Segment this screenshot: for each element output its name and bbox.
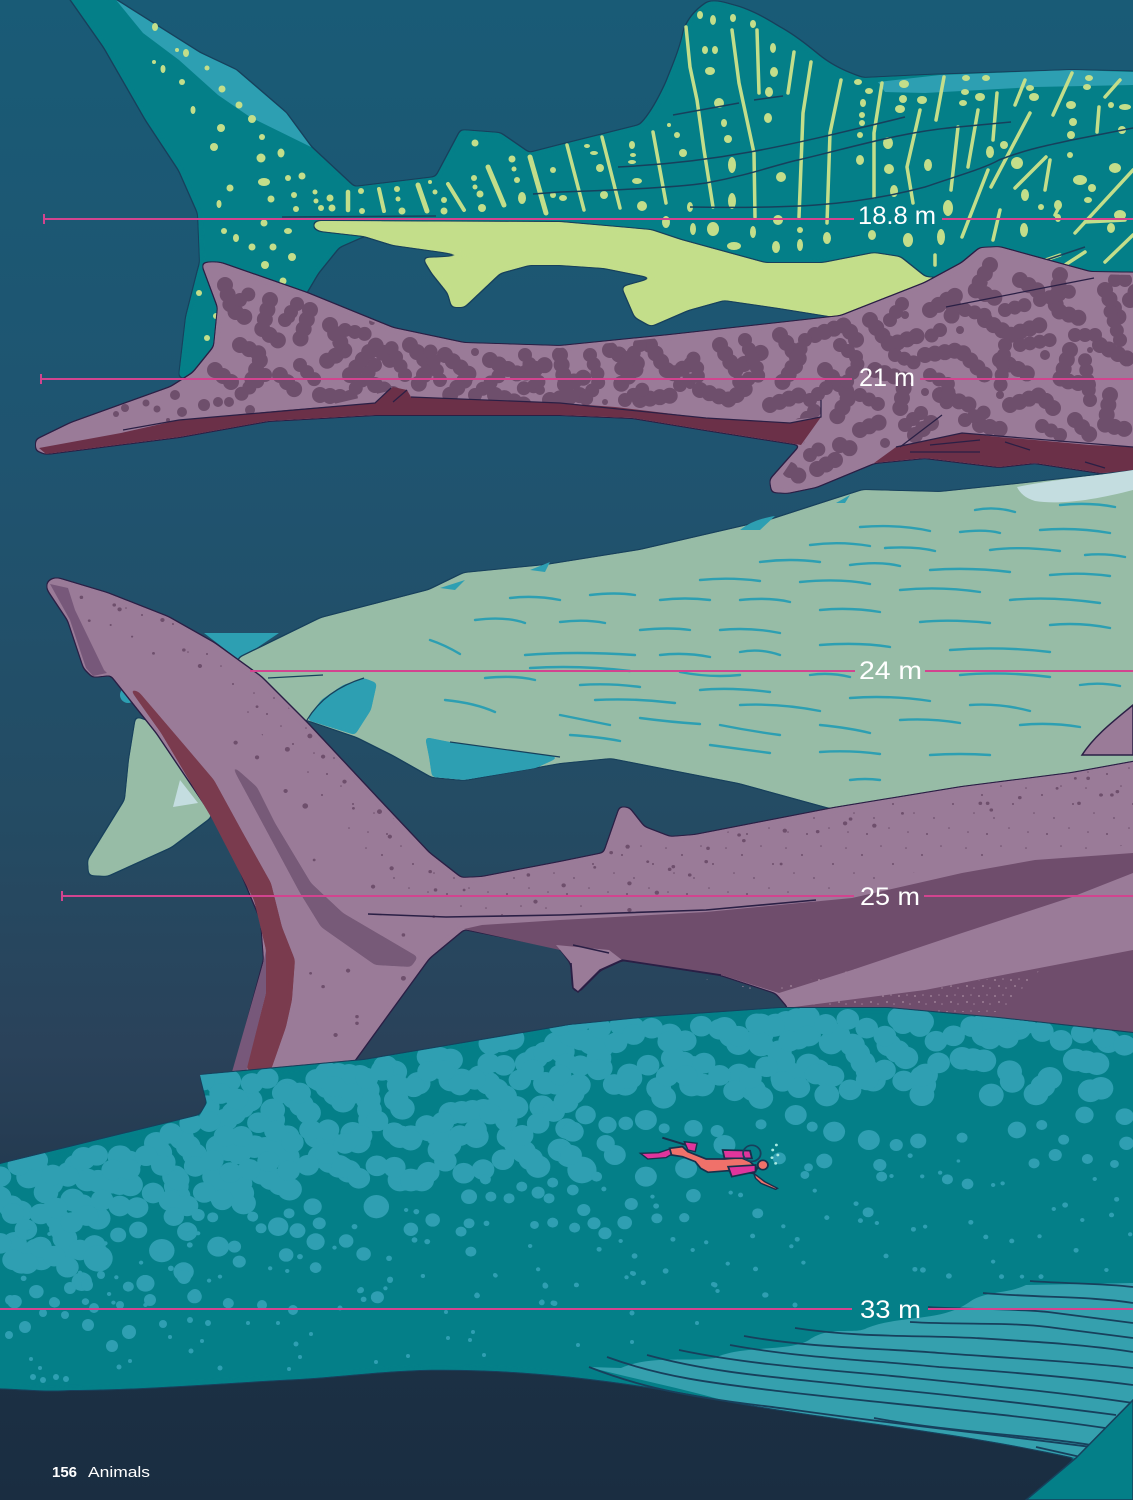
purple shark maroon underside: [874, 433, 1133, 473]
blue whale throat grooves panel: [589, 1283, 1133, 1458]
right mottling blobs: [560, 1015, 1133, 1298]
diver arm: [754, 1173, 777, 1189]
whale dorsal ridge highlights: [440, 495, 850, 590]
scale 21 m: 21 m: [859, 364, 915, 392]
purple shark body lines: [123, 278, 1133, 468]
purple shark tail spots: [113, 390, 255, 422]
whale shark tail highlight: [116, 0, 311, 147]
diver fins: [640, 1142, 697, 1159]
shark tail maroon edge: [129, 688, 295, 1070]
scale 24 m: 24 m: [859, 657, 922, 685]
blue whale: [0, 1008, 1133, 1500]
whale small teal tail tip: [120, 687, 136, 703]
shark body: [47, 578, 1133, 1080]
whale shark stripes: [348, 27, 1133, 265]
scale 25 m: [62, 883, 1133, 911]
whale shark: [57, 0, 1133, 385]
shark dark belly: [464, 853, 1133, 993]
diver head: [758, 1160, 768, 1170]
sperm whale: [88, 468, 1133, 876]
shark pelvic fin: [556, 945, 622, 992]
whale rear fin: [425, 737, 560, 780]
whale shark body: [57, 0, 1133, 385]
blue whale body: [0, 1008, 1133, 1500]
whale skin wrinkles: [430, 504, 1125, 780]
page footer: 156: [52, 1464, 77, 1481]
scale 33 m: 33 m: [860, 1296, 921, 1324]
shark coarse speckle on tail: [80, 596, 538, 1037]
page footer: [52, 1464, 150, 1481]
dark fin at whale belly: [1082, 705, 1133, 755]
purple shark body: [36, 247, 1133, 493]
shark belly grain highlight: [700, 968, 1040, 1012]
page footer: Animals: [88, 1464, 150, 1481]
whale shark lime underside and fins: [313, 221, 1000, 326]
shark pelvic fin line: [571, 945, 721, 992]
blue whale throat groove lines: [589, 1281, 1133, 1458]
whale shark body lines: [282, 96, 1133, 262]
whale shark back highlight: [878, 70, 1133, 93]
shark tail inner streak: [230, 763, 418, 967]
shark tail lower shade: [232, 950, 266, 1072]
whale fin outline: [268, 675, 560, 757]
shark lateral line: [368, 900, 816, 917]
shark fine speckle: [110, 600, 1133, 918]
purple shark mottling: [215, 265, 1133, 480]
scale lines and labels: [0, 202, 1133, 1324]
lower scattered spots: [5, 1270, 798, 1383]
basking shark: [47, 578, 1133, 1080]
whale side fin: [307, 678, 377, 735]
whale teal tail shadow: [204, 633, 279, 660]
whale body: [230, 468, 1133, 810]
purple shark with long tail: [36, 247, 1133, 493]
left mottling blobs: [0, 1037, 570, 1308]
scale 25 m: 25 m: [860, 883, 920, 911]
purple shark maroon belly: [39, 387, 821, 454]
shark tip shade: [50, 584, 107, 676]
whale pale head patch: [1017, 470, 1133, 502]
blue whale flipper edge: [1026, 1400, 1133, 1500]
scale 18.8 m: [44, 202, 1133, 230]
diver tank: [723, 1150, 752, 1158]
diver body and legs: [670, 1147, 757, 1173]
diver snorkel spear: [662, 1138, 686, 1145]
shark lower dark band: [794, 950, 1133, 1040]
whale fluke: [88, 717, 211, 876]
diver hood: [743, 1145, 761, 1161]
whale shark spots: [152, 11, 1131, 341]
shark coarse speckle on body: [561, 777, 1119, 912]
blue whale mottling: [0, 1015, 1133, 1383]
scale 18.8 m: 18.8 m: [858, 202, 936, 230]
scale 21 m: [41, 364, 1133, 392]
whale pale fluke patch: [173, 780, 198, 807]
diver lower tank: [728, 1165, 756, 1177]
scuba diver: [640, 1138, 779, 1189]
diver bubbles: [771, 1144, 779, 1165]
